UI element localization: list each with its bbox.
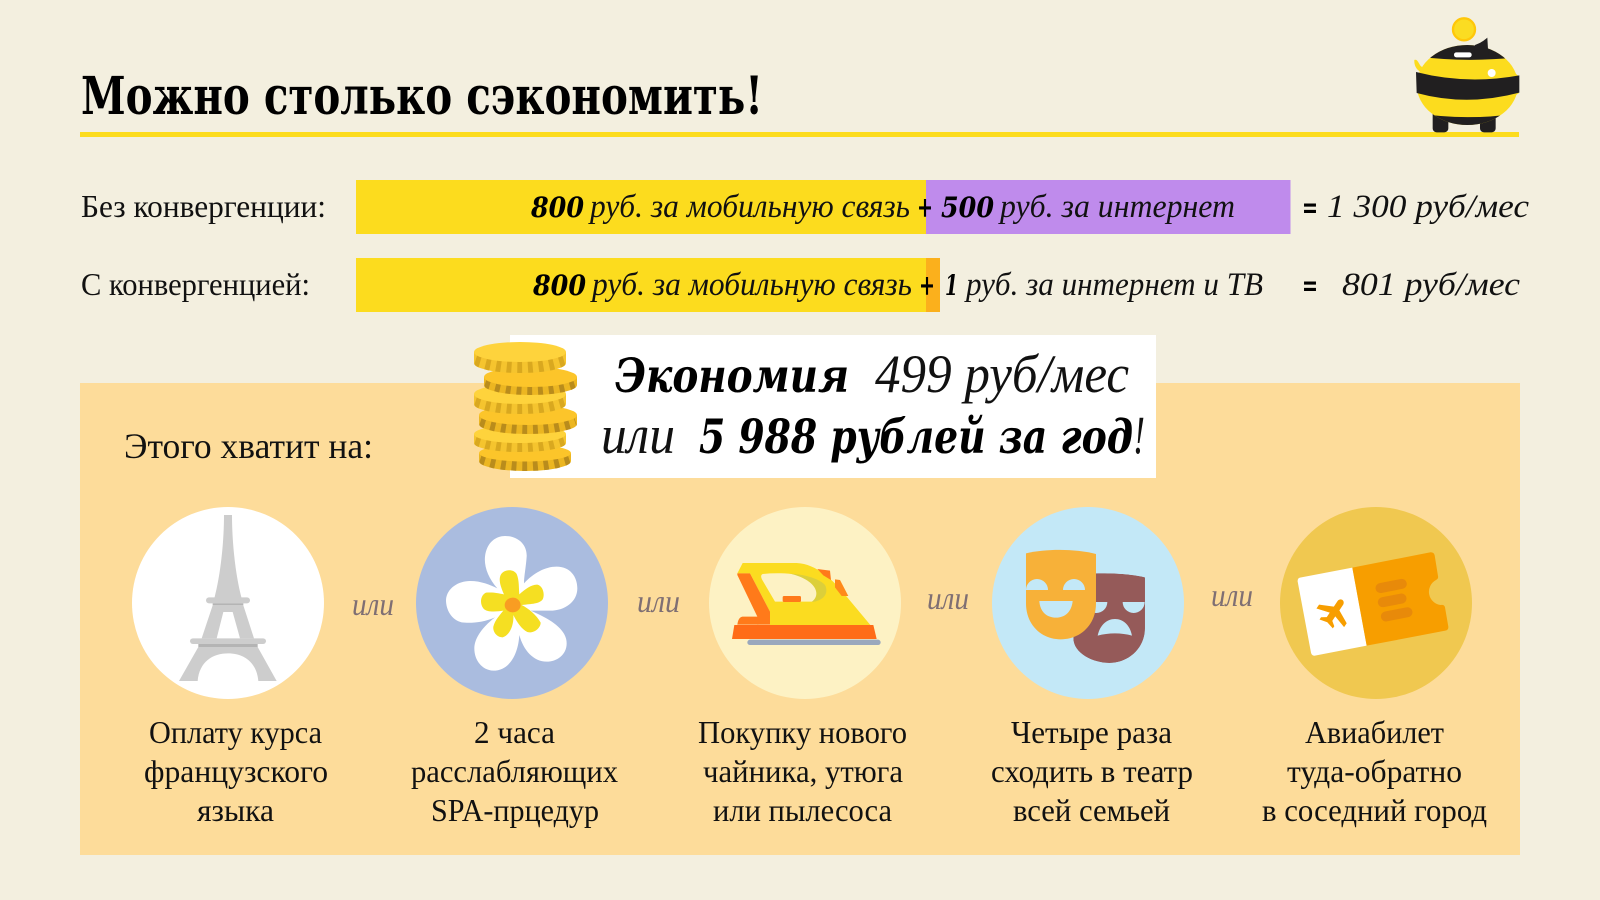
- caption: French course: [144, 714, 328, 828]
- caption: French course: французского: [144, 753, 328, 789]
- caption: appliances: или пылесоса: [713, 792, 892, 828]
- total: with convergence: 801 руб/мес: [1342, 267, 1520, 303]
- icon: theatre masks: [992, 507, 1184, 699]
- caption: French course: языка: [197, 792, 274, 828]
- icon: coin stack: [474, 342, 577, 471]
- bar: without convergence: 500: [941, 191, 994, 224]
- caption: appliances: чайника, утюга: [703, 753, 903, 789]
- callout: savings: 5 988 рублей за год: [699, 410, 1133, 465]
- caption: SPA: 2 часа: [474, 714, 555, 750]
- label: without convergence: Без конвергенции:: [81, 188, 326, 224]
- bar: without convergence: +: [917, 191, 933, 224]
- caption: theatre: всей семьей: [1013, 792, 1170, 828]
- callout: savings: 499 руб/мес: [875, 344, 1129, 404]
- caption: air ticket: [1262, 714, 1487, 828]
- caption: SPA: [411, 714, 618, 828]
- bar: with convergence: 800: [532, 269, 586, 302]
- separator: or 2: или: [637, 583, 680, 619]
- bar: with convergence: 1: [945, 269, 958, 302]
- bar: with convergence: руб. за интернет и ТВ: [964, 267, 1263, 303]
- callout: savings: !: [1133, 405, 1145, 465]
- panel heading: Этого хватит на:: [124, 426, 373, 466]
- bar: with convergence: [356, 258, 1263, 312]
- caption: SPA: расслабляющих: [411, 753, 618, 789]
- caption: appliances: Покупку нового: [698, 714, 907, 750]
- caption: theatre: сходить в театр: [991, 753, 1193, 789]
- total: with convergence: =: [1302, 269, 1318, 302]
- bar: without convergence: руб. за мобильную связь: [588, 189, 910, 225]
- bar: without convergence: руб. за интернет: [998, 189, 1235, 225]
- title underline: [80, 132, 1519, 137]
- icon: Eiffel tower: [132, 507, 324, 699]
- caption: French course: Оплату курса: [149, 714, 322, 750]
- callout: savings: [510, 335, 1156, 478]
- panel: what it buys: [80, 383, 1520, 855]
- separator: or 1: или: [352, 586, 394, 622]
- caption: air ticket: туда-обратно: [1287, 753, 1462, 789]
- total: without convergence: 1 300 руб/мес: [1327, 189, 1529, 225]
- icon: piggy bank: [1413, 18, 1523, 133]
- callout: savings: или: [601, 405, 675, 465]
- caption: theatre: [991, 714, 1193, 828]
- bar: with convergence: руб. за мобильную связь: [590, 267, 912, 303]
- caption: theatre: Четыре раза: [1011, 714, 1172, 750]
- separator: or 4: или: [1211, 577, 1253, 613]
- caption: SPA: SPA-прцедур: [431, 792, 599, 828]
- bar: without convergence: 800: [530, 191, 584, 224]
- separator: or 3: или: [927, 580, 969, 616]
- title: Можно столько сэкономить!: [81, 66, 763, 127]
- bar: with convergence: +: [919, 269, 935, 302]
- caption: air ticket: в соседний город: [1262, 792, 1487, 828]
- icon: iron: [709, 507, 901, 699]
- caption: air ticket: Авиабилет: [1305, 714, 1444, 750]
- callout: savings: Экономия: [615, 349, 849, 404]
- caption: appliances: [698, 714, 907, 828]
- total: without convergence: =: [1302, 191, 1318, 224]
- bar: without convergence: [356, 180, 1290, 234]
- icon: plane ticket: [1280, 507, 1472, 699]
- icon: flower: [416, 507, 608, 699]
- label: with convergence: С конвергенцией:: [81, 266, 310, 302]
